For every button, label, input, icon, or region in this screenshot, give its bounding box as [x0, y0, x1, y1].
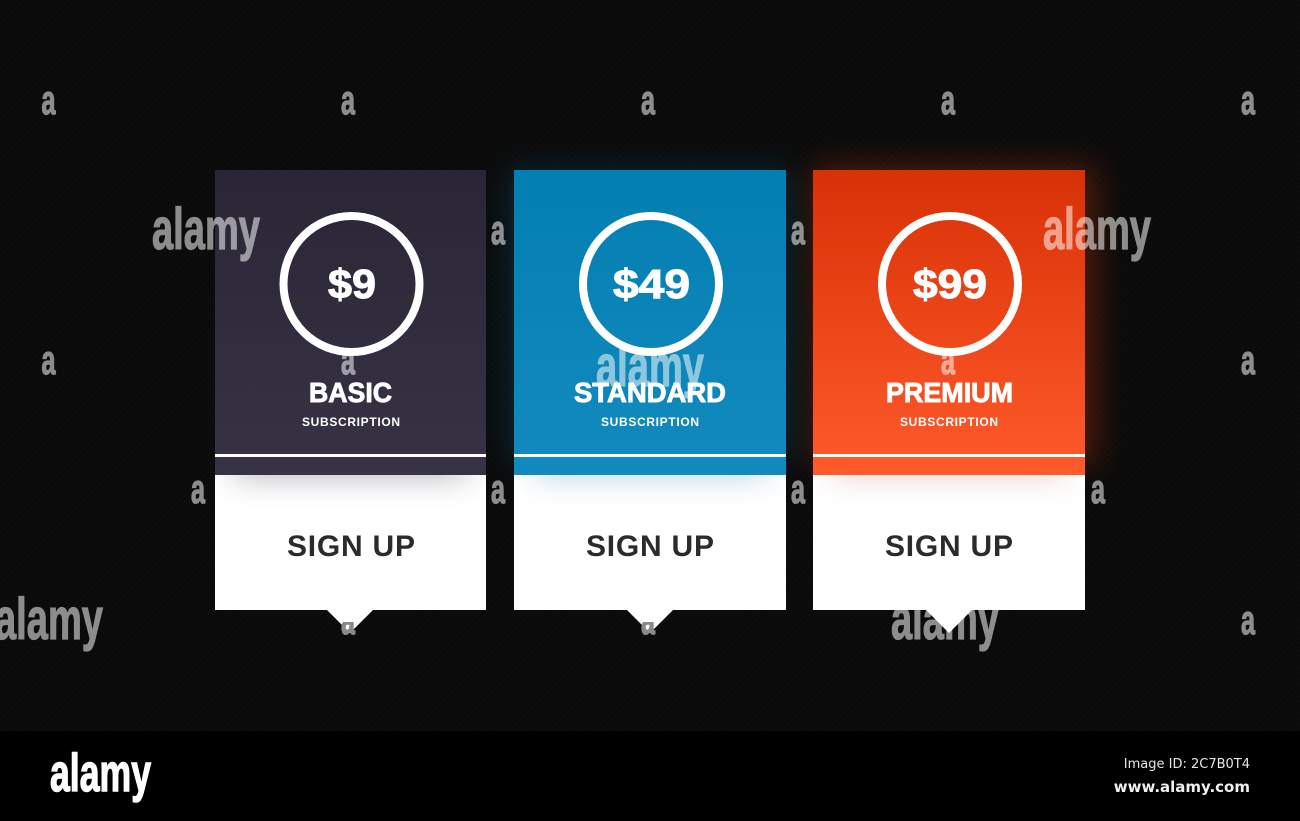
- basic price: $9: [328, 261, 376, 307]
- watermarks: a: [1241, 597, 1256, 643]
- premium price: $99: [913, 261, 987, 307]
- standard subtitle: SUBSCRIPTION: [601, 415, 699, 429]
- standard sign up panel: [514, 475, 786, 610]
- watermarks: [0, 77, 1256, 652]
- premium divider: [813, 454, 1085, 457]
- basic pointer: [327, 610, 373, 633]
- standard name: STANDARD: [574, 377, 726, 408]
- standard pointer: [627, 610, 673, 633]
- footer site url: www.alamy.com: [1114, 778, 1250, 796]
- glow: standard card: [510, 170, 790, 460]
- standard price ring: [583, 216, 719, 352]
- pointer-tip watermarks: [341, 622, 656, 635]
- premium sign up label: SIGN UP: [885, 530, 1013, 563]
- watermarks: a: [791, 466, 806, 512]
- watermark behind premium pointer: alamy: [891, 587, 999, 652]
- watermarks: alamy: [596, 334, 704, 399]
- basic sign up label: SIGN UP: [287, 530, 415, 563]
- watermarks: a: [191, 466, 206, 512]
- watermarks: a: [491, 466, 506, 512]
- premium subtitle: SUBSCRIPTION: [900, 415, 998, 429]
- premium header: [813, 170, 1085, 475]
- standard price: $49: [613, 261, 690, 307]
- watermarks: a: [941, 337, 956, 383]
- pointer-tip watermarks: a: [641, 597, 656, 643]
- pointer-tip watermarks: a: [341, 597, 356, 643]
- watermarks: alamy: [1043, 197, 1151, 262]
- watermarks: a: [42, 337, 56, 383]
- watermarks: a: [941, 77, 956, 123]
- watermarks: a: [641, 77, 656, 123]
- watermarks: alamy: [152, 197, 260, 262]
- watermarks: a: [42, 77, 56, 123]
- glow: premium card: [813, 165, 1097, 465]
- panel: basic: [215, 170, 486, 633]
- footer logo: alamy: [50, 744, 151, 803]
- basic inner shadow: [222, 475, 479, 495]
- standard divider: [514, 454, 786, 457]
- standard header: [514, 170, 786, 475]
- watermarks: a: [791, 207, 806, 253]
- basic subtitle: SUBSCRIPTION: [302, 415, 400, 429]
- premium sign up panel: [813, 475, 1085, 610]
- premium price ring: [882, 216, 1018, 352]
- watermarks: a: [341, 337, 356, 383]
- watermarks: a: [1241, 337, 1256, 383]
- premium name: PREMIUM: [886, 377, 1013, 408]
- panel: premium: [813, 170, 1085, 633]
- footer bar: [0, 731, 1300, 821]
- premium inner shadow: [824, 475, 1074, 492]
- basic name: BASIC: [309, 377, 392, 408]
- basic price ring: [284, 216, 420, 352]
- premium pointer: [926, 610, 972, 633]
- watermarks: a: [491, 207, 506, 253]
- footer image id: Image ID: 2C7B0T4: [1124, 757, 1250, 772]
- watermarks: a: [1091, 466, 1106, 512]
- standard sign up label: SIGN UP: [586, 530, 714, 563]
- basic divider: [215, 454, 486, 457]
- watermarks: a: [1241, 77, 1256, 123]
- standard inner shadow: [521, 475, 779, 493]
- panel: standard: [514, 170, 786, 633]
- basic sign up panel: [215, 475, 486, 610]
- watermarks: a: [341, 77, 356, 123]
- basic header: [215, 170, 486, 475]
